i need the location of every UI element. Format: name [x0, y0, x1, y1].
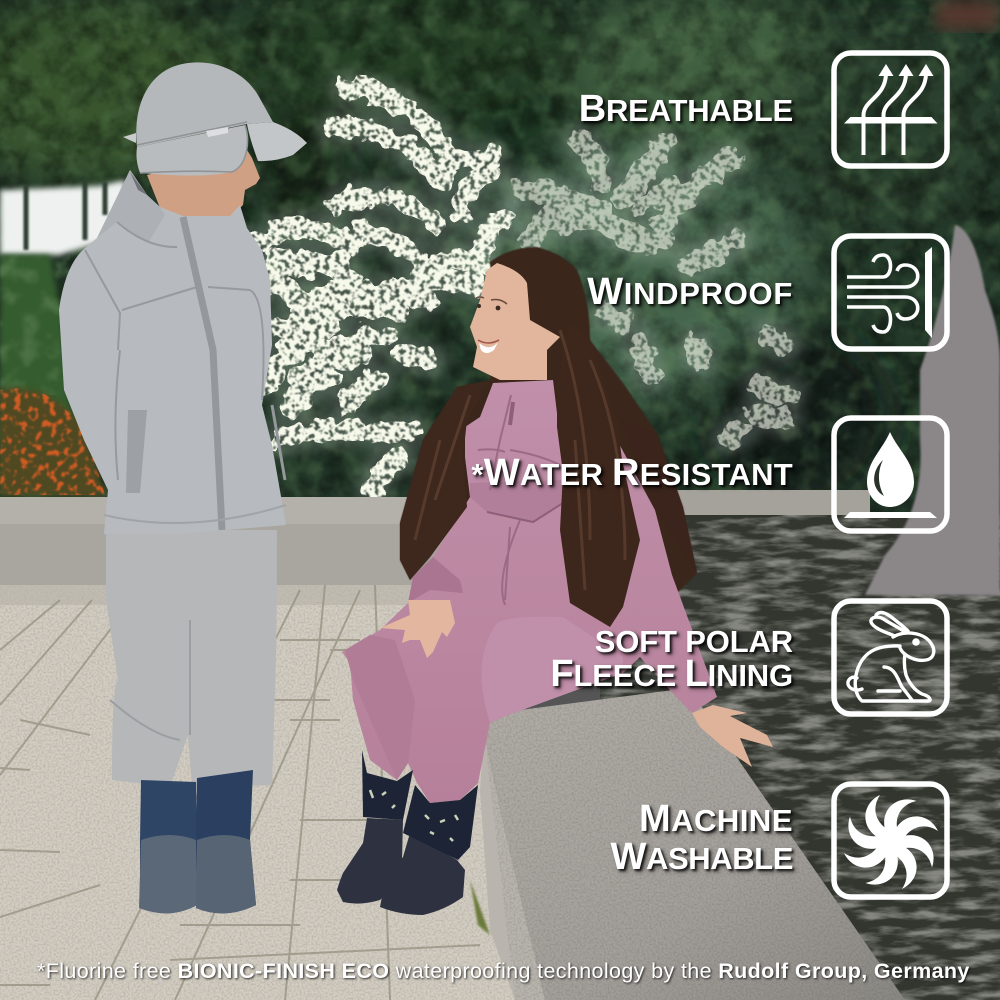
label: soft polar fleece lining: SOFT POLAR: [595, 624, 793, 659]
icon: machine wash swirl: [834, 784, 947, 897]
girl face: [470, 263, 560, 380]
girl hair back: [400, 247, 697, 610]
label: soft polar fleece lining: [550, 624, 796, 695]
stone wall: [0, 490, 870, 585]
white flowering shrub: [262, 88, 790, 490]
boy boots: [139, 770, 256, 913]
girl hair front locks: [400, 320, 697, 627]
icon: rabbit: [834, 601, 947, 714]
boy face and neck: [147, 150, 260, 220]
label: windproof: WINDPROOF: [587, 271, 793, 313]
shrub and orange flowers at left: [0, 255, 105, 495]
girl boots: [337, 750, 478, 915]
icon: breathable: [834, 53, 947, 166]
gray sculpture: [865, 225, 1000, 595]
foliage backdrop: [0, 0, 1000, 540]
brick pavement: [0, 585, 530, 1000]
boy cap: [123, 62, 307, 176]
label: breathable: BREATHABLE: [579, 88, 793, 130]
moss at base of ledge: [470, 880, 490, 935]
label: machine washable: [610, 798, 797, 878]
girl suit: [342, 380, 717, 803]
icon: windproof: [834, 236, 947, 349]
sky gap and tree trunks at left: [0, 180, 125, 255]
boy pants: [106, 530, 277, 787]
water: [600, 515, 1000, 1000]
girl near hand: [380, 600, 455, 658]
icon: water drop: [834, 418, 947, 531]
label: machine washable: WASHABLE: [610, 836, 793, 878]
label: machine washable: MACHINE: [639, 798, 793, 840]
girl far hand: [692, 705, 773, 767]
girl: [337, 247, 773, 915]
boy: [59, 62, 307, 913]
label: soft polar fleece lining: FLEECE LINING: [550, 653, 793, 695]
boy jacket: [59, 170, 286, 534]
concrete ledge: [480, 690, 905, 1000]
footnote: *Fluorine free BIONIC-FINISH ECO waterproofing technology by the Rudolf Group, Germany: [37, 959, 970, 983]
label: water resistant: *WATER RESISTANT: [471, 452, 793, 494]
